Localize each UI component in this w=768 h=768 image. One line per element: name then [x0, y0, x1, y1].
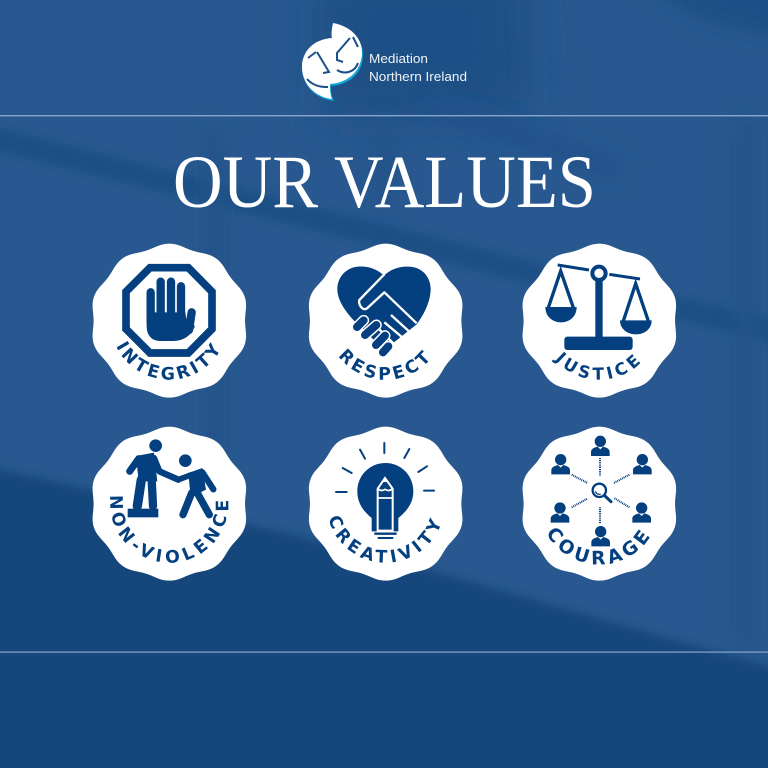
- divider top: [0, 115, 768, 116]
- icon: scales: [545, 265, 652, 350]
- badge: creativity: [308, 426, 462, 581]
- divider bottom: [0, 652, 768, 653]
- label: NON-VIOLENCE: [110, 496, 228, 563]
- title: OUR VALUES: [173, 141, 596, 224]
- label: JUSTICE: [552, 352, 640, 380]
- badge: non-violence: [92, 426, 246, 581]
- icon: pencil bulb: [336, 443, 434, 538]
- logo wordmark: Northern Ireland: [369, 69, 467, 84]
- label: CREATIVITY: [330, 516, 440, 563]
- icon: stop hand: [126, 268, 212, 353]
- label: INTEGRITY: [116, 341, 219, 380]
- badge: integrity: [92, 244, 246, 398]
- icon: connected people: [551, 436, 652, 546]
- badge: justice: [522, 244, 676, 398]
- logo wordmark: Mediation: [369, 51, 428, 66]
- logo: [302, 23, 467, 101]
- label: COURAGE: [548, 528, 650, 564]
- logo mark: [302, 23, 363, 101]
- icon: helping figures: [128, 439, 213, 517]
- icon: heart handshake: [337, 267, 431, 352]
- label: RESPECT: [338, 348, 428, 380]
- badge: respect: [308, 244, 462, 398]
- badge: courage: [522, 426, 676, 581]
